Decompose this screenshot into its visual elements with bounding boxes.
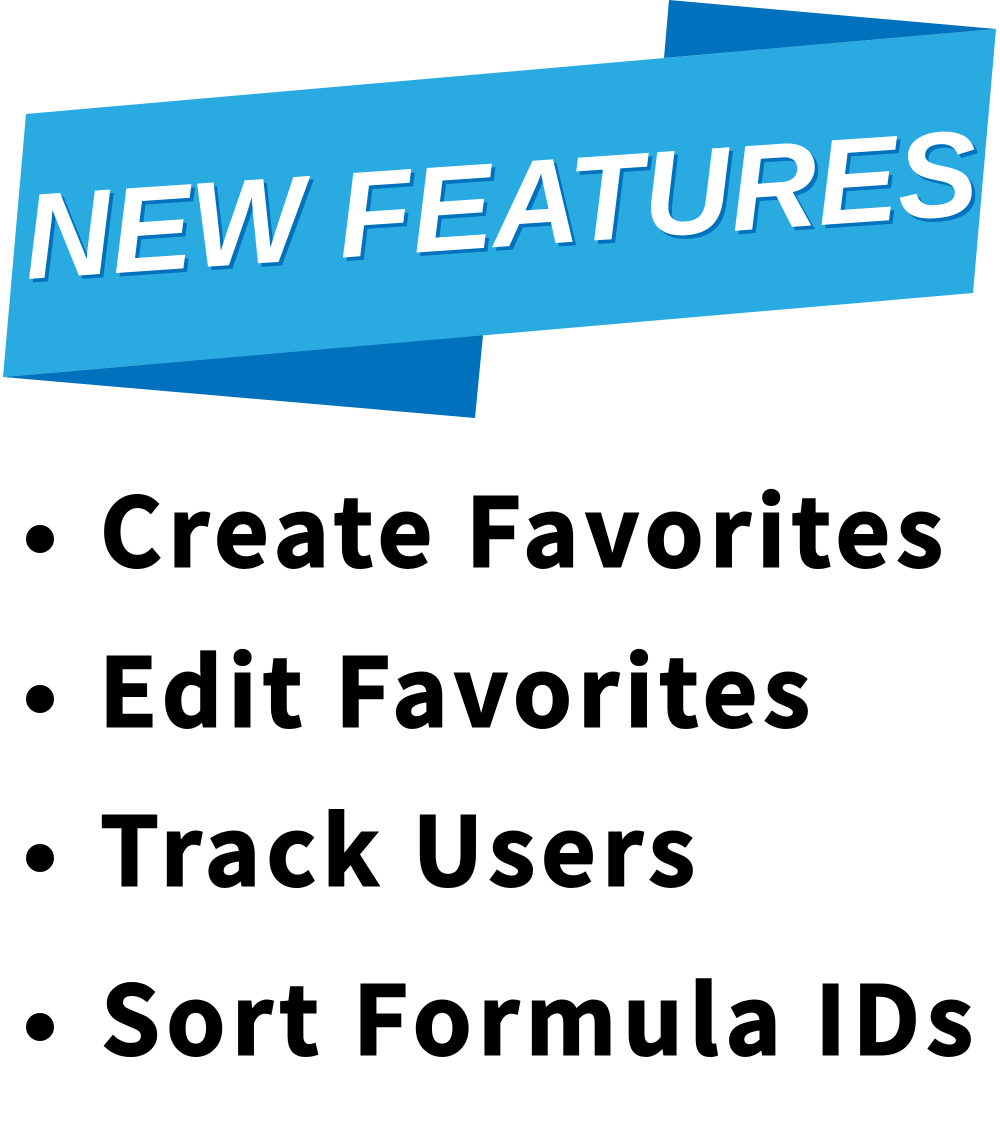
ribbon bottom fold — [3, 335, 483, 418]
banner title: NEW FEATURES — [19, 104, 982, 305]
item: track users: Track Users — [100, 776, 695, 914]
item: edit favorites: Edit Favorites — [99, 618, 810, 754]
ribbon top fold — [664, 0, 996, 58]
ribbon main band — [3, 29, 996, 377]
feature list — [27, 458, 973, 1082]
item: create favorites: Create Favorites — [100, 458, 943, 594]
banner title: NEW FEATURES — [23, 107, 985, 309]
item: sort formula ids: Sort Formula IDs — [101, 946, 973, 1082]
ribbon banner — [3, 0, 996, 418]
